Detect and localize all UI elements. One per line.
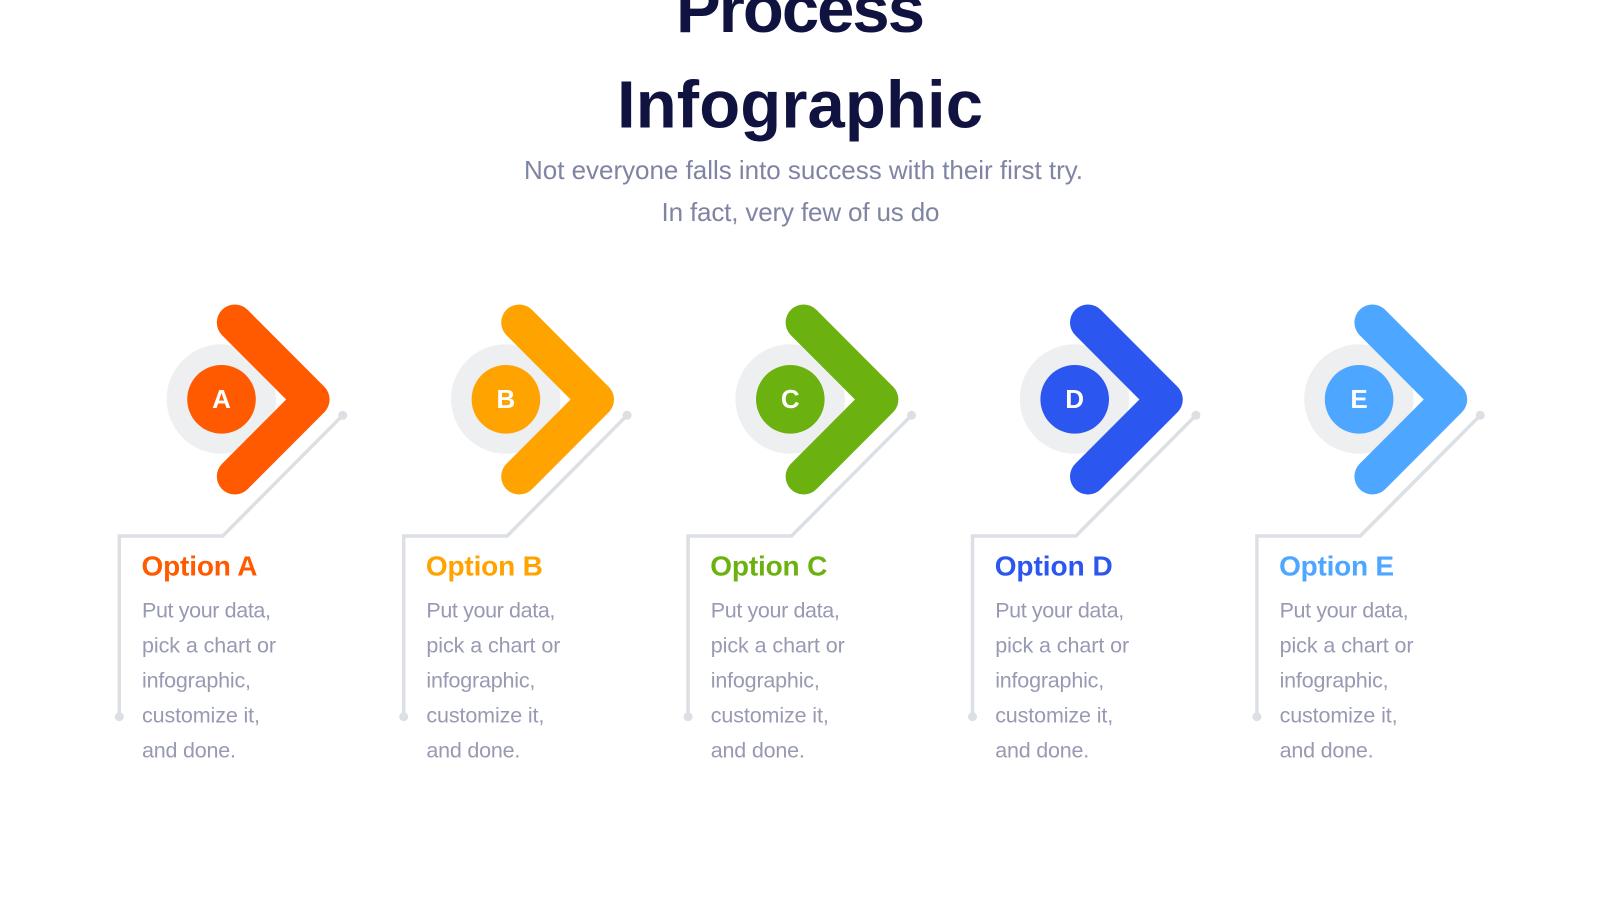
text block: option E: infographic,	[1280, 669, 1389, 693]
text block: option C: and done.	[711, 738, 805, 762]
text block: option B: pick a chart or	[426, 634, 560, 658]
text block: option D: customize it,	[995, 704, 1113, 728]
text block: option E: customize it,	[1280, 704, 1398, 728]
heading: option A: Option A	[142, 551, 258, 582]
panel: option C	[684, 322, 916, 762]
title: Infographic	[617, 68, 983, 143]
text block: option A: Put your data,	[142, 599, 271, 623]
connector line D	[968, 411, 1200, 721]
subtitle: Not everyone falls into success with their first try.	[524, 155, 1083, 185]
icon: badge background C	[735, 344, 845, 454]
text block: option E	[1280, 599, 1414, 762]
icon: letter badge E: E	[1350, 384, 1368, 414]
subtitle	[524, 155, 1083, 227]
text block: option A: and done.	[142, 738, 236, 762]
icon: badge background D	[1020, 344, 1129, 454]
icon: letter badge A	[187, 365, 256, 434]
text block: option B: Put your data,	[426, 599, 555, 623]
connector line B	[399, 411, 632, 721]
text block: option D: Put your data,	[995, 599, 1124, 623]
text block: option A: pick a chart or	[142, 634, 276, 658]
panel: option E	[1252, 322, 1485, 762]
panel: option B	[399, 322, 632, 762]
icon: chevron A	[235, 322, 312, 476]
title	[617, 0, 983, 143]
icon: chevron C	[804, 322, 880, 476]
panel: option A	[115, 322, 347, 762]
text block: option B: infographic,	[426, 669, 535, 693]
icon: letter badge B: B	[497, 384, 515, 414]
panel: option D	[968, 322, 1200, 762]
text block: option D: infographic,	[995, 669, 1104, 693]
heading: option D: Option D	[995, 551, 1113, 582]
heading: option E: Option E	[1279, 551, 1394, 582]
text block: option B: and done.	[426, 738, 520, 762]
text block: option E: pick a chart or	[1280, 634, 1414, 658]
connector line A	[115, 411, 347, 721]
text block: option E: and done.	[1280, 738, 1374, 762]
text block: option B	[426, 599, 560, 762]
text block: option A	[142, 599, 276, 762]
subtitle: In fact, very few of us do	[662, 197, 940, 227]
icon: letter badge D	[1040, 365, 1109, 434]
text block: option C: infographic,	[711, 669, 820, 693]
icon: letter badge E	[1325, 365, 1393, 434]
text block: option E: Put your data,	[1280, 599, 1409, 623]
text block: option A: customize it,	[142, 704, 260, 728]
icon: chevron B	[519, 322, 596, 476]
icon: badge background E	[1304, 344, 1414, 454]
text block: option C	[711, 599, 845, 762]
icon: letter badge C: C	[781, 384, 800, 414]
icon: badge background B	[451, 344, 560, 454]
icon: letter badge A: A	[212, 384, 231, 414]
icon: letter badge B	[472, 365, 540, 434]
text block: option A: infographic,	[142, 669, 251, 693]
text block: option C: Put your data,	[711, 599, 840, 623]
icon: chevron E	[1372, 322, 1449, 476]
icon: chevron D	[1088, 322, 1165, 476]
icon: letter badge C	[756, 365, 825, 434]
icon: letter badge D: D	[1065, 384, 1084, 414]
icon: badge background A	[167, 344, 276, 454]
heading: option B: Option B	[426, 551, 543, 582]
connector line E	[1252, 411, 1485, 721]
text block: option D: and done.	[995, 738, 1089, 762]
text block: option D	[995, 599, 1129, 762]
text block: option C: customize it,	[711, 704, 829, 728]
text block: option D: pick a chart or	[995, 634, 1129, 658]
connector line C	[684, 411, 916, 721]
text block: option B: customize it,	[426, 704, 544, 728]
heading: option C: Option C	[710, 551, 827, 582]
text block: option C: pick a chart or	[711, 634, 845, 658]
